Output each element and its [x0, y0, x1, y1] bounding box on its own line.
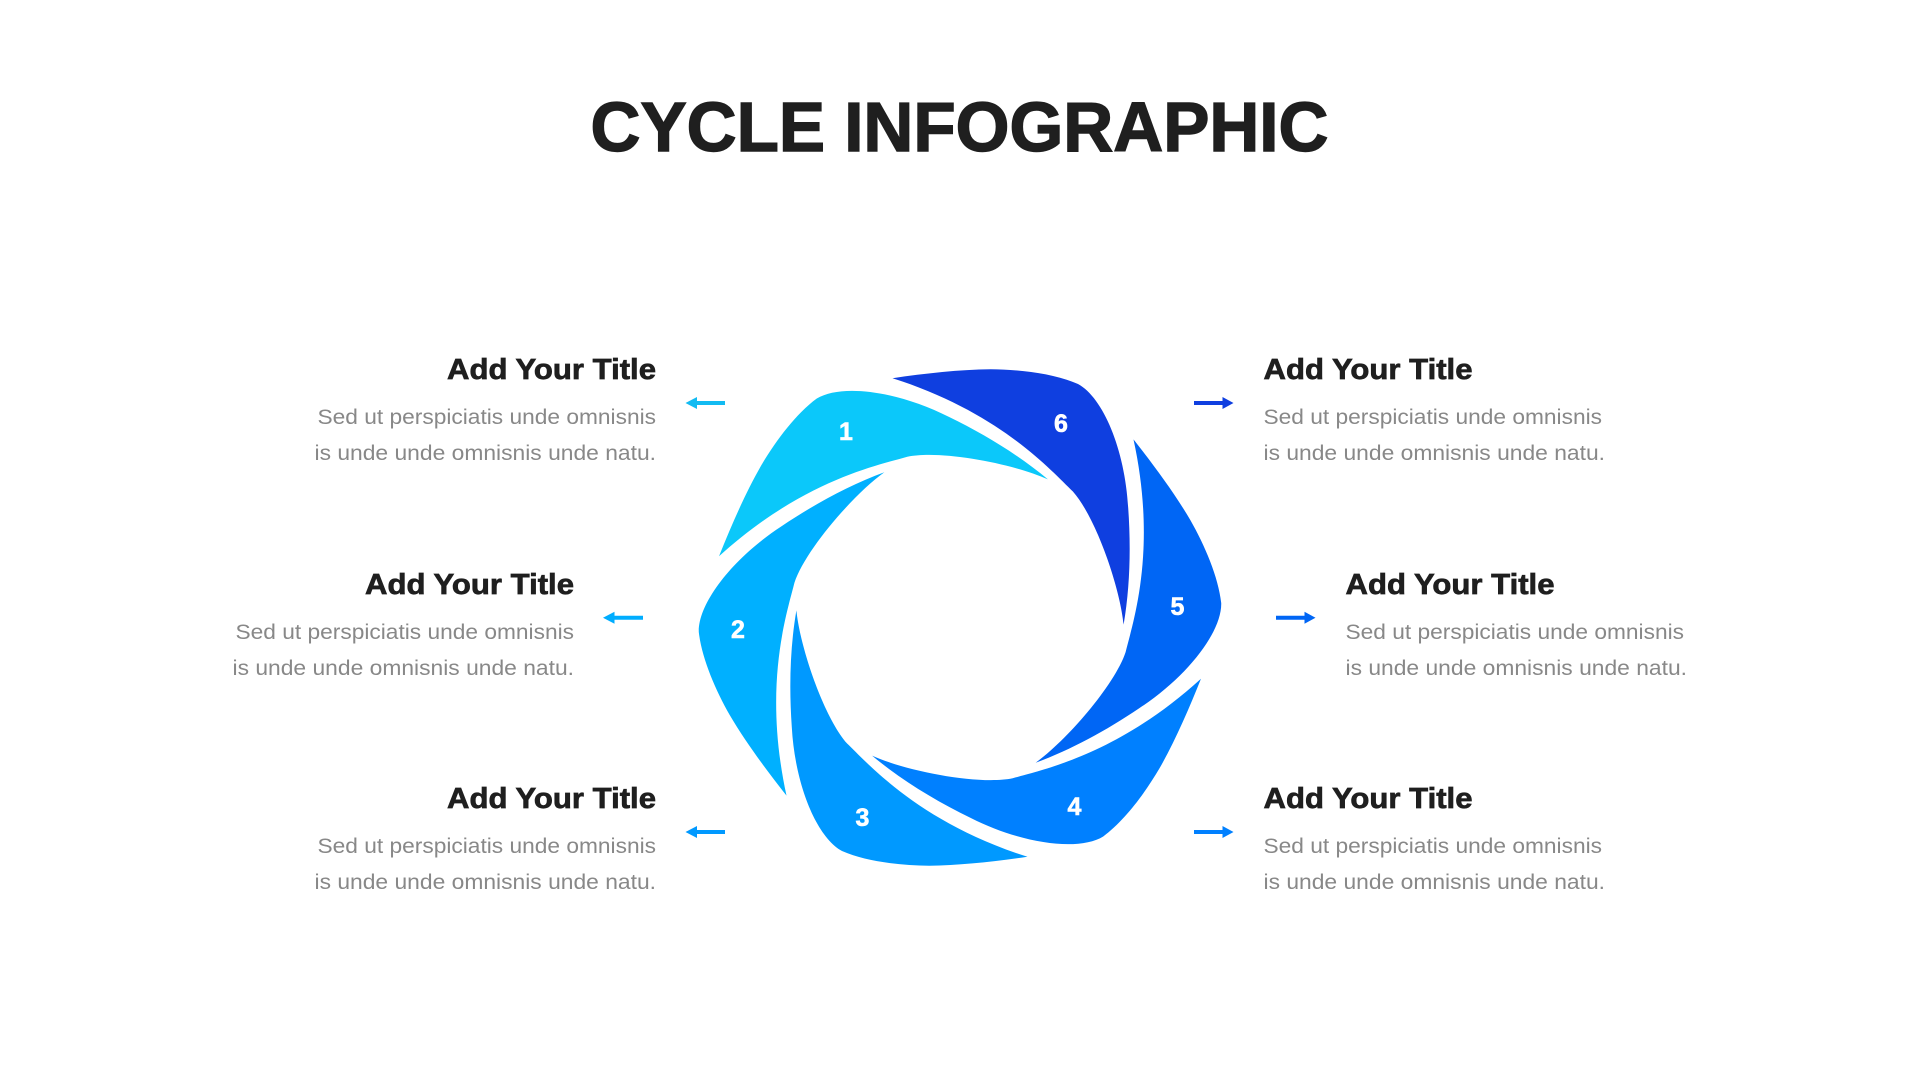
text block 6: Sed ut perspiciatis unde omnisnis — [1264, 406, 1602, 429]
segment 5: 5 — [1171, 593, 1185, 621]
segment 3 — [790, 610, 1028, 866]
segment 1 — [711, 346, 1051, 680]
text block 5: is unde unde omnisnis unde natu. — [1346, 657, 1687, 680]
text block 2: Sed ut perspiciatis unde omnisnis — [236, 621, 574, 644]
arrow 3 — [686, 826, 725, 838]
arrow 1 — [686, 397, 725, 409]
title: CYCLE INFOGRAPHIC — [590, 88, 1328, 166]
text block 4 — [1264, 783, 1605, 894]
text block 1 — [314, 354, 656, 465]
arrow 6 — [1194, 397, 1234, 409]
text block 6 — [1264, 354, 1605, 465]
text block 5 — [1346, 569, 1687, 680]
text block 3: is unde unde omnisnis unde natu. — [314, 871, 656, 894]
text block 3: Add Your Title — [447, 783, 656, 815]
text block 1: Add Your Title — [447, 354, 656, 386]
text block 3 — [314, 783, 656, 894]
segment 2 — [660, 467, 1000, 800]
text block 2: is unde unde omnisnis unde natu. — [232, 657, 574, 680]
text block 4: Add Your Title — [1264, 783, 1472, 815]
text block 6: Add Your Title — [1264, 354, 1472, 386]
cycle diagram — [660, 346, 1260, 889]
segment 2: 2 — [731, 616, 745, 644]
text block 1: Sed ut perspiciatis unde omnisnis — [318, 406, 656, 429]
text block 2 — [232, 569, 574, 680]
text block 1: is unde unde omnisnis unde natu. — [314, 442, 656, 465]
text block 6: is unde unde omnisnis unde natu. — [1264, 442, 1605, 465]
text block 5: Sed ut perspiciatis unde omnisnis — [1346, 621, 1684, 644]
segment 5 — [920, 435, 1260, 768]
segment 4: 4 — [1068, 793, 1082, 821]
segment 6 — [892, 369, 1130, 625]
text block 4: Sed ut perspiciatis unde omnisnis — [1264, 835, 1602, 858]
arrow 4 — [1194, 826, 1234, 838]
text block 2: Add Your Title — [365, 569, 574, 601]
segment 6: 6 — [1054, 410, 1068, 438]
arrow 2 — [603, 612, 643, 624]
text block 3: Sed ut perspiciatis unde omnisnis — [318, 835, 656, 858]
segment 1: 1 — [839, 418, 853, 446]
segment 3: 3 — [856, 804, 869, 832]
text block 5: Add Your Title — [1346, 569, 1554, 601]
arrow 5 — [1276, 612, 1316, 624]
segment 4 — [869, 555, 1209, 889]
text block 4: is unde unde omnisnis unde natu. — [1264, 871, 1605, 894]
